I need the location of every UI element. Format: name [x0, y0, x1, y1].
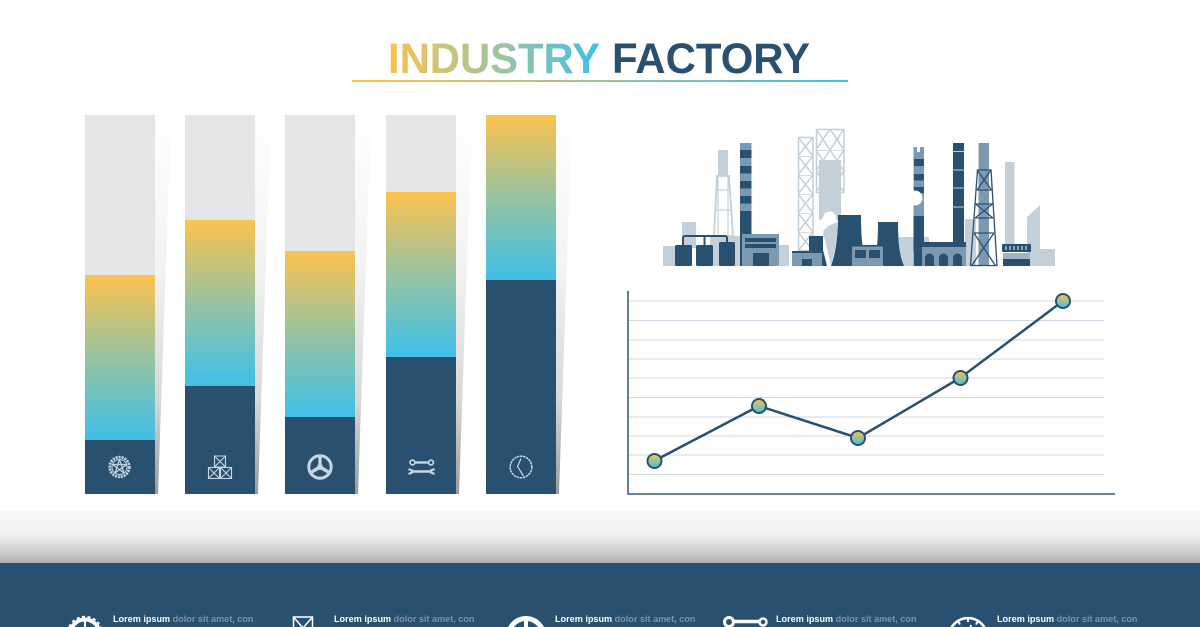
footer panel — [0, 563, 1200, 627]
bar 4 — [386, 115, 472, 494]
trend line — [654, 301, 1063, 461]
storage tanks — [675, 236, 735, 266]
grid lines — [628, 301, 1104, 474]
cooling towers — [809, 215, 904, 266]
icon: steering wheel — [309, 456, 331, 478]
title — [352, 35, 848, 83]
footer item 5: Lorem ipsum dolor sit amet, con — [997, 614, 1137, 624]
title: FACTORY — [612, 35, 810, 83]
notched chimney — [908, 147, 924, 266]
icon: gauge — [949, 618, 987, 627]
icon: crates — [208, 456, 232, 478]
icon: gear — [68, 617, 102, 627]
smoke plume — [818, 212, 838, 266]
icon: clock — [510, 456, 532, 478]
factory building — [742, 234, 779, 266]
axes — [628, 291, 1115, 494]
footer item 2: Lorem ipsum dolor sit amet, con — [334, 614, 474, 624]
bar 3 — [285, 115, 371, 494]
data points — [648, 294, 1070, 468]
footer item 4: Lorem ipsum dolor sit amet, con — [776, 614, 916, 624]
icon: gear — [110, 457, 129, 477]
lattice towers — [798, 130, 844, 250]
bar chart — [85, 115, 572, 494]
line chart — [628, 291, 1115, 494]
icon: crate — [294, 617, 312, 627]
footer item 3: Lorem ipsum dolor sit amet, con — [555, 614, 695, 624]
tall dark chimney and hall — [922, 143, 966, 266]
footer item 5 — [949, 614, 1137, 627]
bar 5 — [486, 115, 572, 494]
title: INDUSTRY — [388, 35, 600, 83]
shadow band — [0, 511, 1200, 563]
light background buildings — [663, 150, 1055, 266]
lattice pylon — [970, 143, 997, 266]
footer item 2 — [294, 614, 474, 627]
footer item 1 — [68, 614, 253, 627]
striped chimney — [740, 143, 752, 266]
front building — [852, 245, 883, 266]
factory skyline — [663, 130, 1055, 266]
bar 2 — [185, 115, 271, 494]
icon: wrench — [724, 618, 766, 626]
footer item 4 — [724, 614, 916, 627]
footer item 3 — [508, 614, 695, 627]
small building — [792, 251, 822, 266]
icon: wheel — [508, 618, 544, 627]
machine block — [1002, 244, 1031, 266]
icon: wrenches — [408, 460, 434, 474]
bar 1 — [85, 115, 171, 494]
footer item 1: Lorem ipsum dolor sit amet, con — [113, 614, 253, 624]
